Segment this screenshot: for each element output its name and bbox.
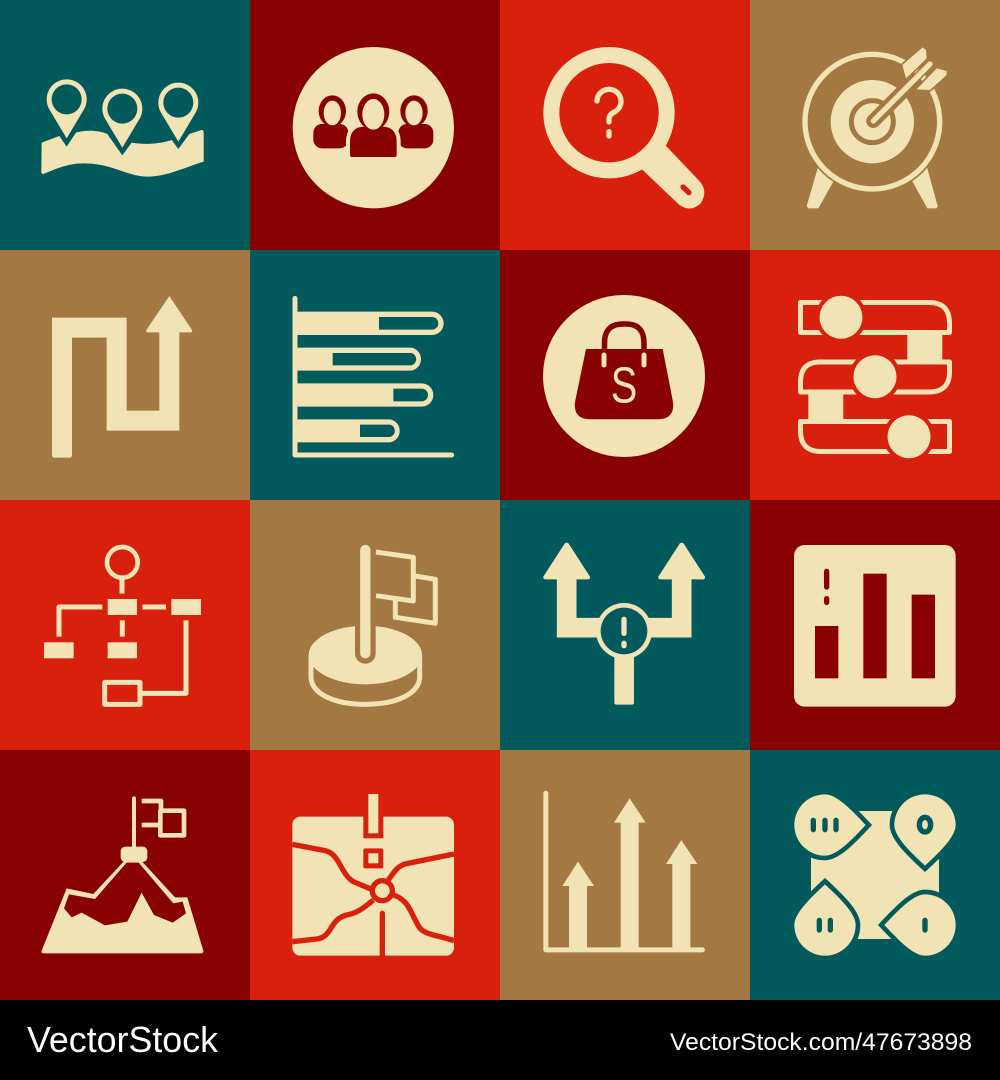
icon: zigzag up arrow (52, 296, 192, 458)
panel: flowchart (0, 500, 250, 750)
panel: flag on disc (250, 500, 500, 750)
icon: flag on mountain peak (42, 798, 203, 953)
panel: road map with marker (250, 750, 500, 1000)
panel: rising arrow chart (500, 750, 750, 1000)
chart: three bars on card (794, 545, 956, 707)
icon: magnifying glass (551, 55, 704, 209)
icon: split arrows with warning (543, 543, 705, 705)
icon: flowchart diagram (44, 547, 201, 704)
panel: horizontal bar chart (250, 250, 500, 500)
icon: map with pins (41, 79, 204, 177)
text: S letter on bag: S (611, 357, 637, 414)
chart: three rising arrows (546, 793, 702, 950)
panel: mountain with flag (0, 750, 250, 1000)
panel: magnifier with question mark (500, 0, 750, 250)
panel: team of three people (250, 0, 500, 250)
icon: flag on platform (309, 550, 435, 704)
text: image URL: VectorStock.com/47673898 (670, 1029, 972, 1056)
panel: winding arrow (0, 250, 250, 500)
panel: shopping bag (500, 250, 750, 500)
panel: bar chart with alert (750, 500, 1000, 750)
icon: road map (292, 794, 454, 956)
icon: bag with S (543, 295, 705, 457)
icon: target with arrow (805, 47, 947, 208)
chart: progress bars (295, 298, 452, 455)
footer: black attribution bar (0, 1000, 1000, 1080)
icon: three people in circle (293, 47, 454, 208)
icon: three sliders (800, 296, 950, 458)
panel: map with three pins (0, 0, 250, 250)
text: VectorStock logo: VectorStock (27, 1019, 219, 1060)
icon: four teardrops around square (794, 794, 956, 956)
panel: archery target (750, 0, 1000, 250)
panel: slider controls (750, 250, 1000, 500)
panel: four drop-shaped pointers (750, 750, 1000, 1000)
panel: forked arrows with alert (500, 500, 750, 750)
